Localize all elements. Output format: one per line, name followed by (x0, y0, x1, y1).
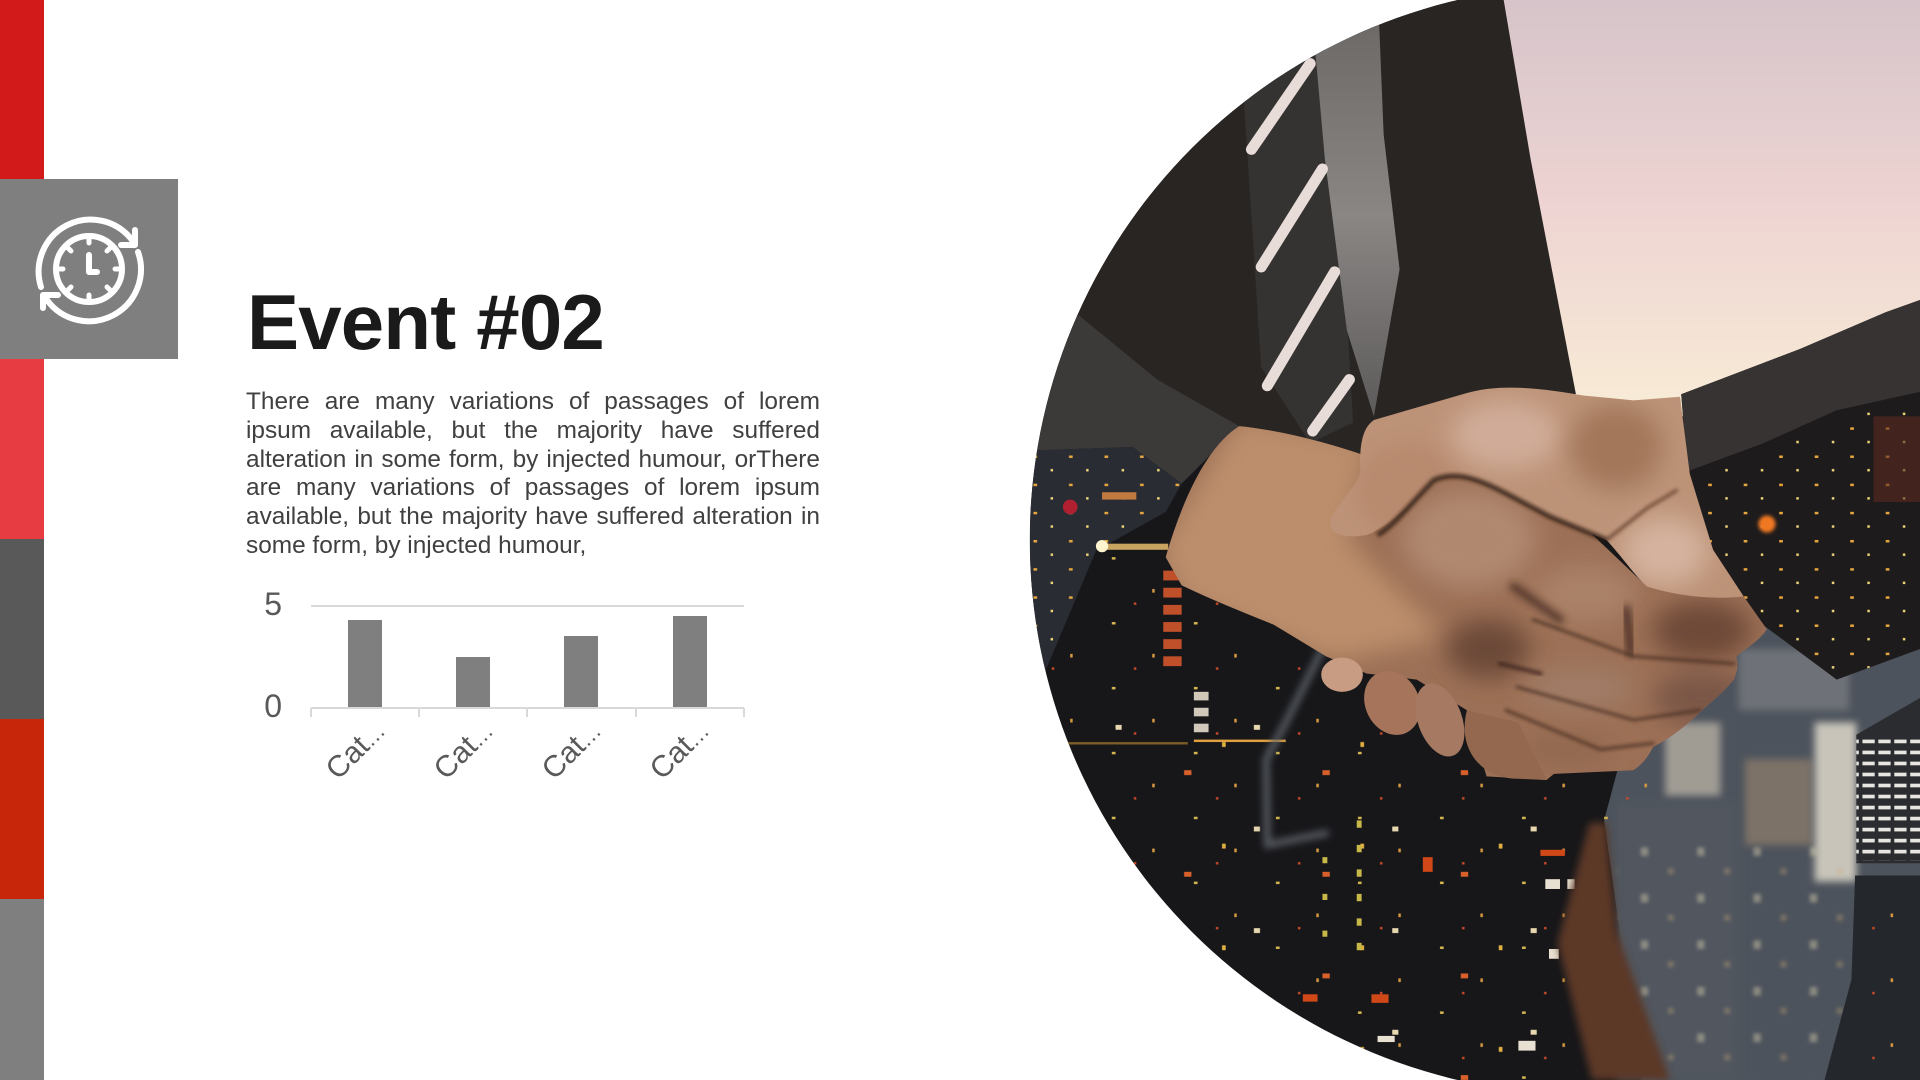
fingers (1321, 658, 1363, 692)
blurred city lower right (1604, 612, 1920, 1080)
bar chart: 0 (264, 688, 282, 724)
body text: ipsum available, but the majority have suffered (246, 417, 820, 444)
handshake hands (1166, 388, 1767, 780)
bar chart: Cat… (644, 714, 716, 786)
bar chart (264, 586, 745, 786)
icon tile: clock with cycle arrows (0, 179, 178, 359)
bar chart: Cat… (536, 714, 608, 786)
upper hand (1330, 388, 1744, 598)
left city lights (1029, 447, 1665, 1080)
body text: some form, by injected humour, (246, 532, 586, 559)
body text (246, 388, 820, 559)
bar chart: Cat… (428, 714, 500, 786)
title: Event #02 (247, 278, 604, 366)
ghost forearm (1558, 823, 1670, 1080)
body text: available, but the majority have suffered alteration in (246, 503, 820, 530)
left suit and tie (1029, 0, 1576, 484)
body text: are many variations of passages of lorem ipsum (246, 474, 820, 501)
right sleeve (1681, 300, 1920, 680)
bar chart: Cat… (320, 714, 392, 786)
lower hand (1166, 426, 1767, 780)
photo: handshake over city in circle (1030, 0, 1920, 1080)
sidebar: colour bars (0, 0, 44, 1080)
body text: There are many variations of passages of lorem (246, 388, 820, 415)
bar chart: 5 (264, 586, 282, 622)
body text: alteration in some form, by injected humour, orThere (246, 446, 820, 473)
